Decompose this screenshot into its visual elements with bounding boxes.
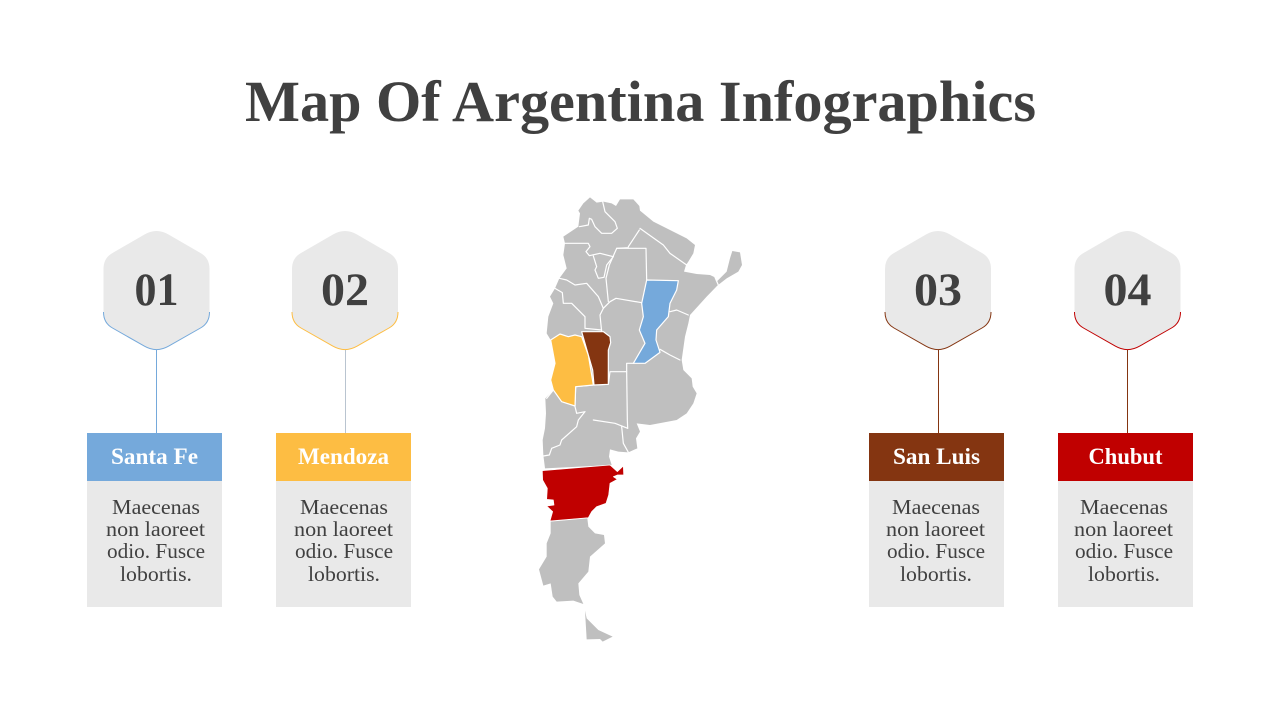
text block 01: lobortis.	[120, 562, 192, 586]
text block 01	[87, 481, 222, 607]
heading: San Luis: San Luis	[893, 444, 980, 469]
hexagon 02	[292, 231, 398, 350]
heading: Santa Fe	[87, 433, 222, 481]
hexagon 04	[1074, 231, 1180, 350]
text block 04: lobortis.	[1088, 562, 1160, 586]
heading: Mendoza: Mendoza	[298, 444, 389, 469]
text block 02: lobortis.	[308, 562, 380, 586]
province borders	[543, 202, 718, 456]
connector 01	[156, 350, 158, 433]
text block 03: lobortis.	[900, 562, 972, 586]
hexagon 01: 01	[134, 264, 178, 316]
heading: Chubut	[1058, 433, 1193, 481]
hexagon 03: 03	[914, 264, 962, 316]
text block 04: Maecenas	[1080, 495, 1168, 519]
hexagon 03	[885, 231, 991, 350]
hexagon 04: 04	[1104, 264, 1152, 316]
heading: Mendoza	[276, 433, 411, 481]
hexagon 01	[104, 231, 210, 350]
panel: 03 San Luis	[869, 231, 1004, 607]
text block 04	[1058, 481, 1193, 607]
text block 01: Maecenas	[112, 495, 200, 519]
text block 04: non laoreet	[1074, 517, 1173, 541]
hexagon 02: 02	[321, 264, 369, 316]
panel: 02 Mendoza	[276, 231, 411, 607]
title: Map Of Argentina Infographics	[245, 69, 1036, 134]
northern and central provinces	[543, 197, 742, 468]
text block 03: odio. Fusce	[887, 539, 985, 563]
panel: 01 Santa Fe	[87, 231, 222, 607]
region: Chubut	[542, 465, 624, 521]
region: Mendoza	[551, 334, 593, 406]
text block 01: odio. Fusce	[107, 539, 205, 563]
region: Tierra del Fuego	[585, 611, 613, 642]
connector 02	[344, 350, 346, 433]
panel: 04 Chubut	[1058, 231, 1193, 607]
region: San Luis	[582, 332, 611, 385]
text block 03: non laoreet	[886, 517, 985, 541]
text block 04: odio. Fusce	[1075, 539, 1173, 563]
region: Santa Fe	[633, 280, 678, 363]
text block 02: non laoreet	[294, 517, 393, 541]
connector 03	[938, 350, 940, 433]
map of Argentina	[539, 197, 742, 642]
text block 01: non laoreet	[106, 517, 205, 541]
text block 02	[276, 481, 411, 607]
heading: Chubut: Chubut	[1088, 444, 1163, 469]
text block 02: odio. Fusce	[295, 539, 393, 563]
heading: San Luis	[869, 433, 1004, 481]
text block 02: Maecenas	[300, 495, 388, 519]
region: Santa Cruz	[539, 518, 605, 604]
text block 03: Maecenas	[892, 495, 980, 519]
connector 04	[1126, 350, 1128, 433]
text block 03	[869, 481, 1004, 607]
heading: Santa Fe: Santa Fe	[111, 444, 198, 469]
